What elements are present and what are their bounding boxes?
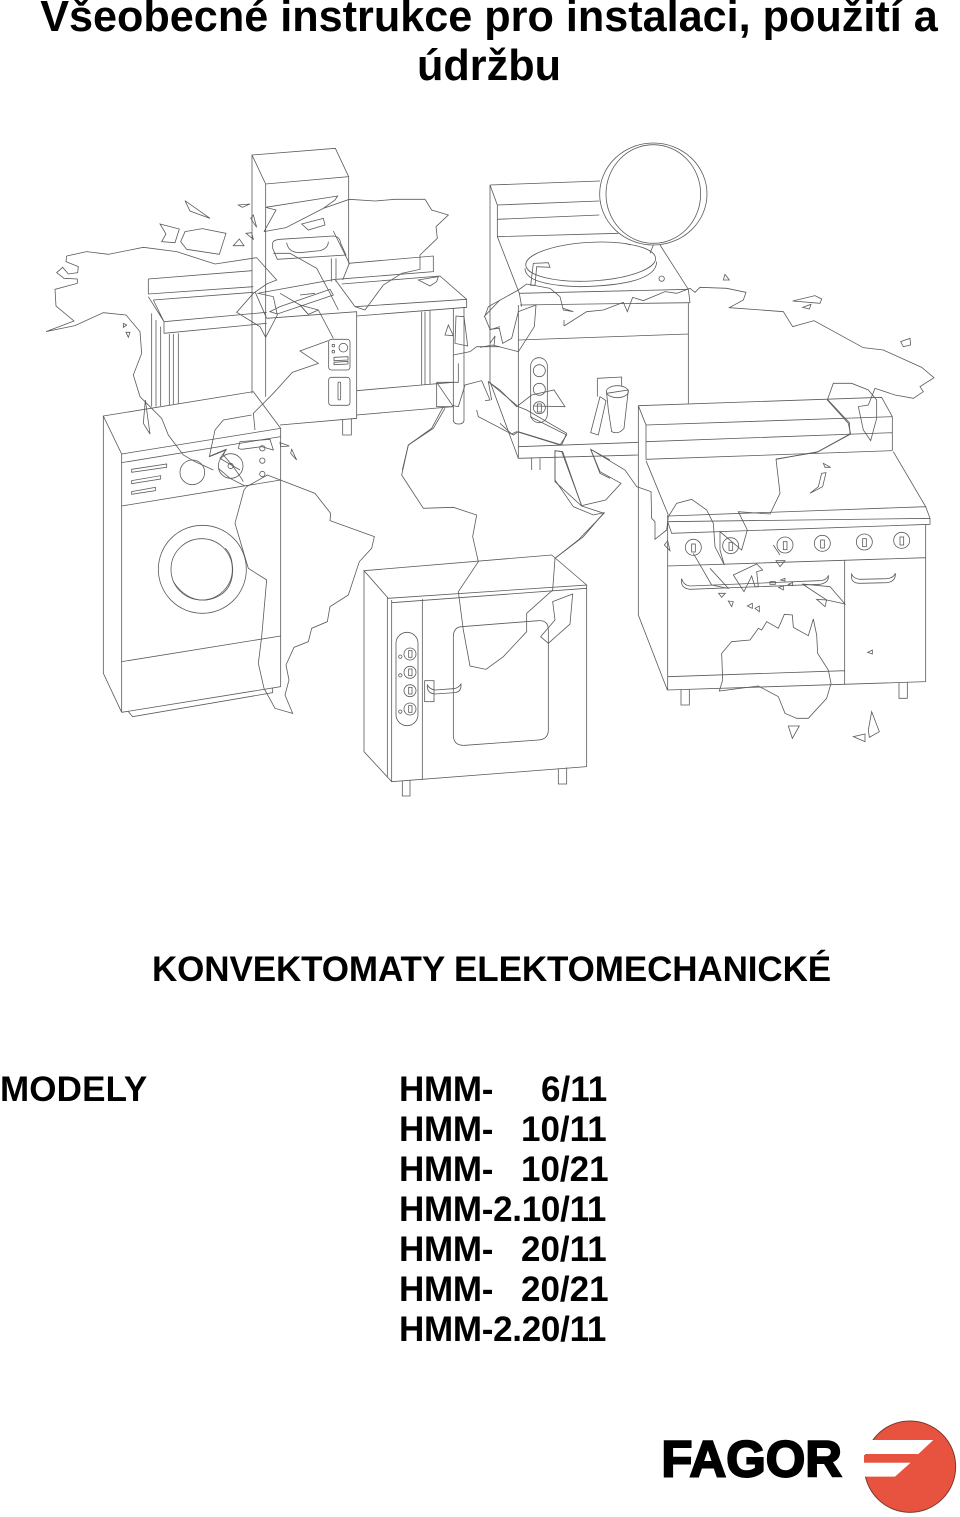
logo wordmark: FAGOR xyxy=(661,1430,842,1487)
subtitle: KONVEKTOMATY ELEKTOMECHANICKÉ xyxy=(152,950,831,989)
appliance: convection oven xyxy=(364,555,587,796)
model list: 20/11 xyxy=(521,1230,607,1269)
logo emblem xyxy=(860,1421,956,1512)
model list: HMM- xyxy=(399,1150,493,1189)
model list: 20/21 xyxy=(521,1270,609,1309)
logo: FAGOR xyxy=(661,1420,956,1513)
model list: HMM- xyxy=(399,1230,493,1269)
models label: MODELY xyxy=(0,1070,147,1109)
world map: Asia xyxy=(480,274,934,459)
title xyxy=(40,0,938,90)
model list: 10/11 xyxy=(521,1110,607,1149)
model list: HMM-2.10/11 xyxy=(399,1190,606,1229)
model list: 6/11 xyxy=(541,1070,607,1109)
world map: Africa xyxy=(402,382,610,669)
model list xyxy=(399,1070,609,1349)
model list: HMM- xyxy=(399,1070,493,1109)
world map: Southeast Asia and Australia xyxy=(555,399,879,742)
appliance: fryer with work tables xyxy=(148,148,467,435)
model list: HMM-2.20/11 xyxy=(399,1310,606,1349)
illustration: kitchen appliances over world map xyxy=(46,142,935,796)
appliance: gas range xyxy=(638,397,930,705)
appliance: kettle with open lid xyxy=(490,143,707,470)
model list: HMM- xyxy=(399,1110,493,1149)
model list: HMM- xyxy=(399,1270,493,1309)
world map: Americas xyxy=(46,201,333,470)
appliance: washing machine xyxy=(103,392,281,717)
world map: South America xyxy=(210,449,374,713)
world map: Europe xyxy=(264,196,500,470)
title: údržbu xyxy=(417,42,561,90)
model list: 10/21 xyxy=(521,1150,609,1189)
